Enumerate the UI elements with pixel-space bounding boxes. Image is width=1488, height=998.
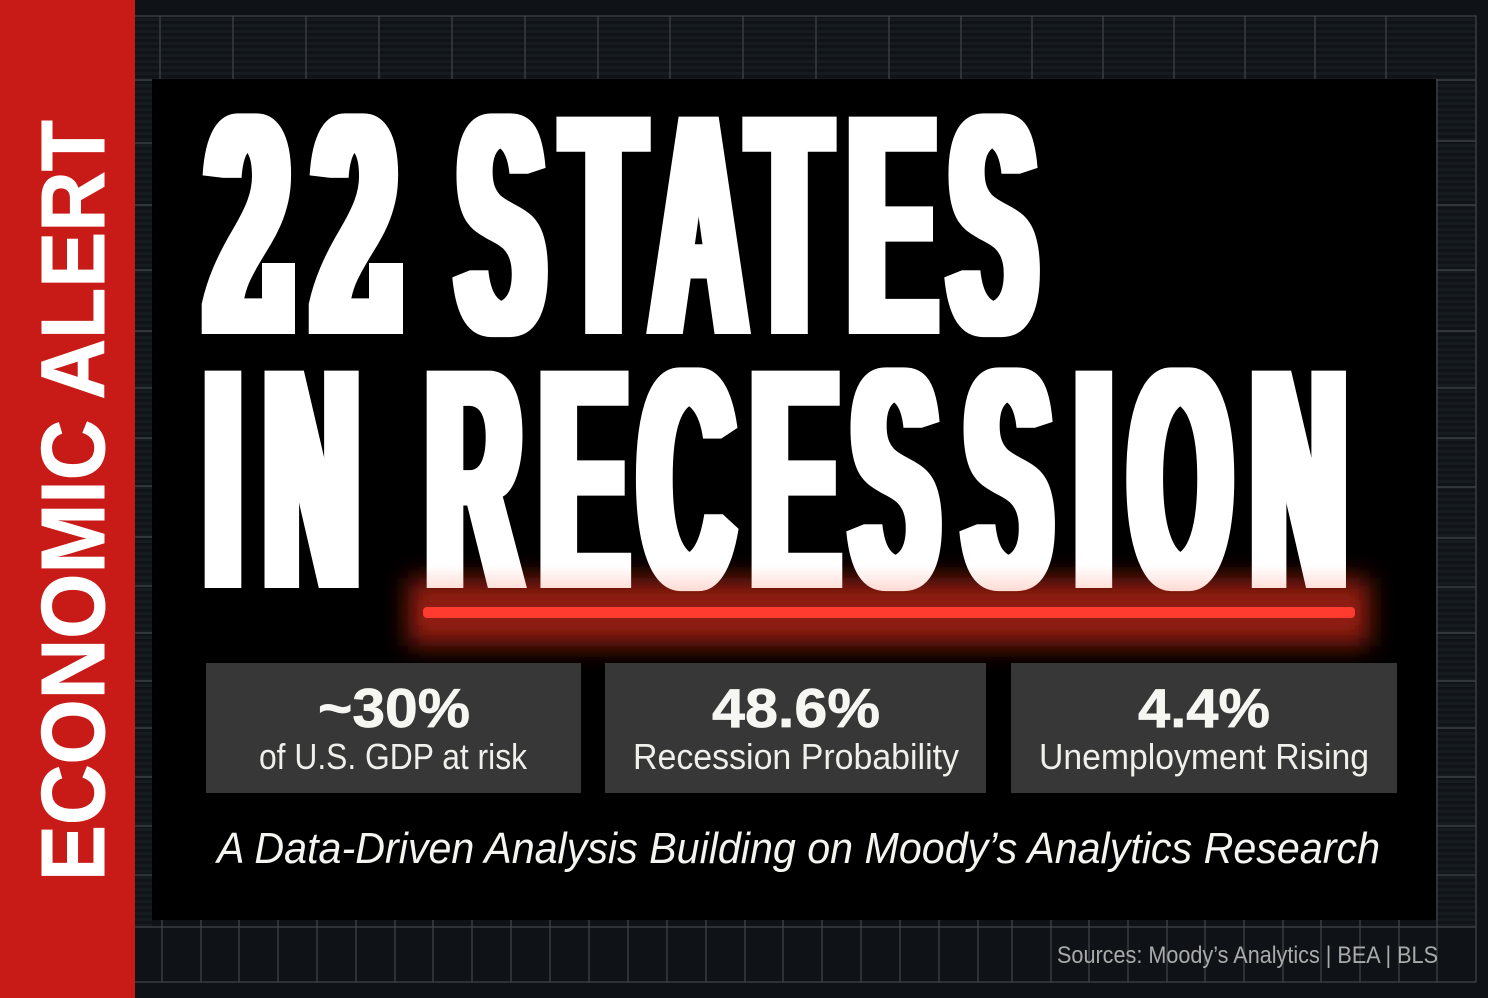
stat card: GDP at risk: ~30% bbox=[318, 677, 470, 739]
red underline bbox=[423, 607, 1355, 618]
headline line 2: IN RECESSION bbox=[205, 303, 1346, 656]
headline line 1: STATES bbox=[458, 49, 1036, 402]
stat card: GDP at risk: of U.S. GDP at risk bbox=[259, 736, 528, 777]
sources: Sources: Moody’s Analytics | BEA | BLS bbox=[1057, 942, 1438, 969]
banner label: ECONOMIC ALERT bbox=[24, 120, 124, 881]
stat card: GDP at risk bbox=[206, 663, 581, 793]
headline line 1 bbox=[205, 48, 1036, 402]
panel: red side banner bbox=[0, 0, 135, 998]
stat card: unemployment: Unemployment Rising bbox=[1039, 736, 1369, 777]
headline line 1: 22 bbox=[205, 48, 397, 402]
subtitle: A Data-Driven Analysis Building on Moody’s Analytics Research bbox=[214, 824, 1380, 873]
panel: black main panel bbox=[152, 79, 1436, 920]
stat card: recession probability bbox=[605, 663, 986, 793]
stat card: unemployment: 4.4% bbox=[1138, 677, 1270, 739]
stat card: recession probability: Recession Probability bbox=[633, 736, 959, 777]
underline glow bbox=[408, 578, 1370, 646]
stat card: recession probability: 48.6% bbox=[712, 677, 880, 739]
stat card: unemployment bbox=[1011, 663, 1397, 793]
